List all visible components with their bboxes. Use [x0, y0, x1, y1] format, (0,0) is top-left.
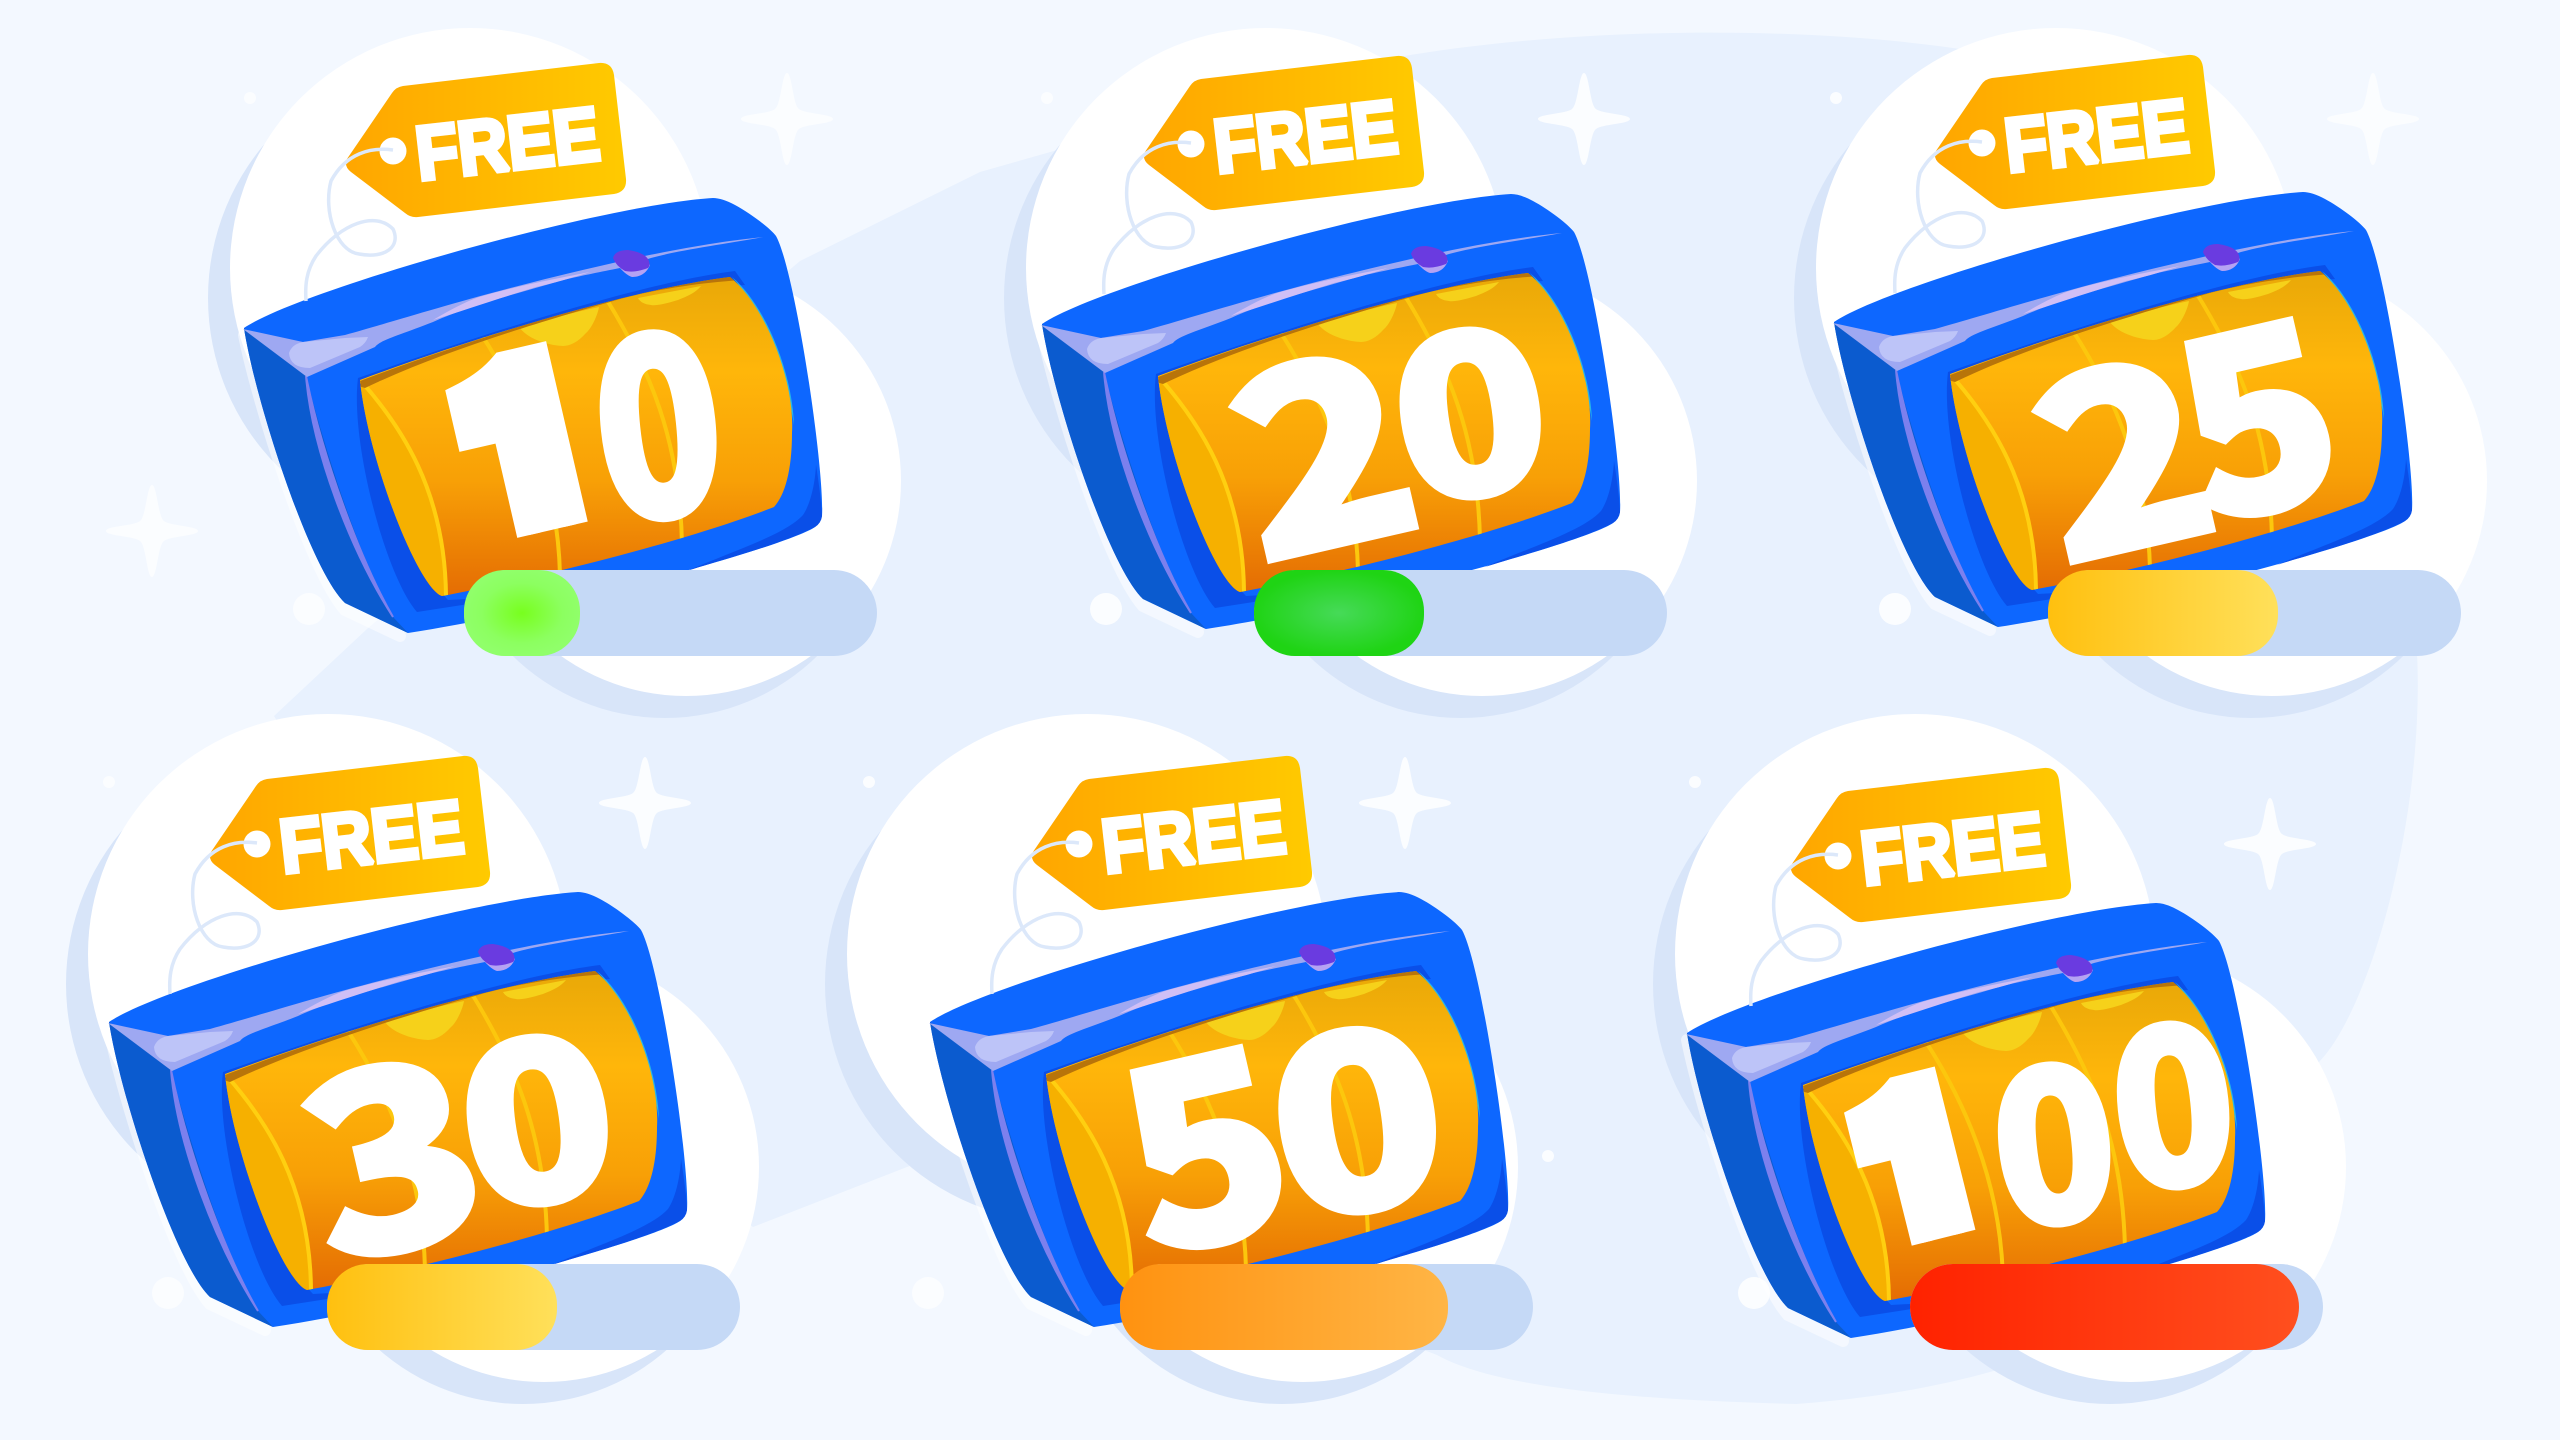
price tag: FREE	[411, 92, 604, 197]
number 20: 0	[1368, 226, 1568, 570]
number 25: 2	[1996, 245, 2243, 636]
dots	[1830, 92, 1911, 625]
number 20: 2	[1192, 236, 1447, 636]
progress bar	[1254, 570, 1667, 656]
dots	[1689, 776, 1770, 1309]
number 100: 0	[1975, 968, 2130, 1291]
number 30: 0	[435, 933, 635, 1277]
slot machine	[243, 198, 822, 636]
price tag	[170, 756, 490, 994]
number 25	[1996, 208, 2370, 636]
dots	[103, 776, 184, 1309]
price tag: FREE	[2000, 84, 2193, 189]
panel: 10 free	[106, 28, 901, 718]
slot machine	[929, 892, 1508, 1330]
number 30: 3	[263, 945, 514, 1337]
sparkle star left	[106, 485, 198, 577]
price tag	[1751, 768, 2071, 1006]
sparkle star	[2327, 73, 2419, 165]
price tag	[1895, 55, 2215, 293]
sparkle star	[2224, 798, 2316, 890]
price tag	[1104, 56, 1424, 294]
backdrop circles	[208, 28, 901, 718]
number 50	[1081, 916, 1465, 1330]
slot machine	[1833, 192, 2412, 630]
progress bar	[2048, 570, 2461, 656]
price tag: FREE	[1209, 85, 1402, 190]
panel: 50 free	[825, 714, 1554, 1404]
backdrop circles	[66, 714, 759, 1404]
sparkle star	[599, 757, 691, 849]
number 10	[445, 329, 717, 538]
number 50: 0	[1244, 916, 1465, 1291]
price tag: FREE	[1097, 785, 1290, 890]
backdrop circles	[1004, 28, 1697, 718]
sparkle star	[1538, 73, 1630, 165]
number 20	[1192, 226, 1568, 636]
price tag	[306, 63, 626, 301]
price tag: FREE	[275, 785, 468, 890]
dots	[244, 92, 325, 625]
progress bar	[1120, 1264, 1533, 1350]
price tag: FREE	[1856, 797, 2049, 902]
number 10: 0	[574, 222, 739, 595]
progress bar	[327, 1264, 740, 1350]
panel: 20 free	[1004, 28, 1697, 718]
number 30	[263, 933, 635, 1337]
backdrop circles	[1794, 28, 2487, 718]
slot machine	[108, 892, 687, 1330]
number 10: 1	[396, 207, 664, 710]
number 25: 5	[2137, 208, 2370, 596]
number 100: 0	[2093, 924, 2250, 1254]
progress bar	[1910, 1264, 2323, 1350]
progress bar	[464, 570, 877, 656]
dots	[863, 776, 1554, 1309]
panel: 100 free	[1653, 714, 2346, 1404]
sparkle star	[741, 73, 833, 165]
panel: 25 free	[1794, 28, 2487, 718]
number 50: 5	[1081, 933, 1321, 1330]
price tag	[992, 756, 1312, 994]
dots	[1041, 92, 1122, 625]
backdrop circles	[825, 714, 1518, 1404]
sparkle star	[1359, 757, 1451, 849]
slot machine	[1041, 194, 1620, 632]
panel: 30 free	[66, 714, 759, 1404]
number 100: 1	[1797, 944, 2047, 1402]
slot machine	[1686, 903, 2265, 1341]
number 100	[1844, 1020, 2230, 1246]
backdrop circles	[1653, 714, 2346, 1404]
